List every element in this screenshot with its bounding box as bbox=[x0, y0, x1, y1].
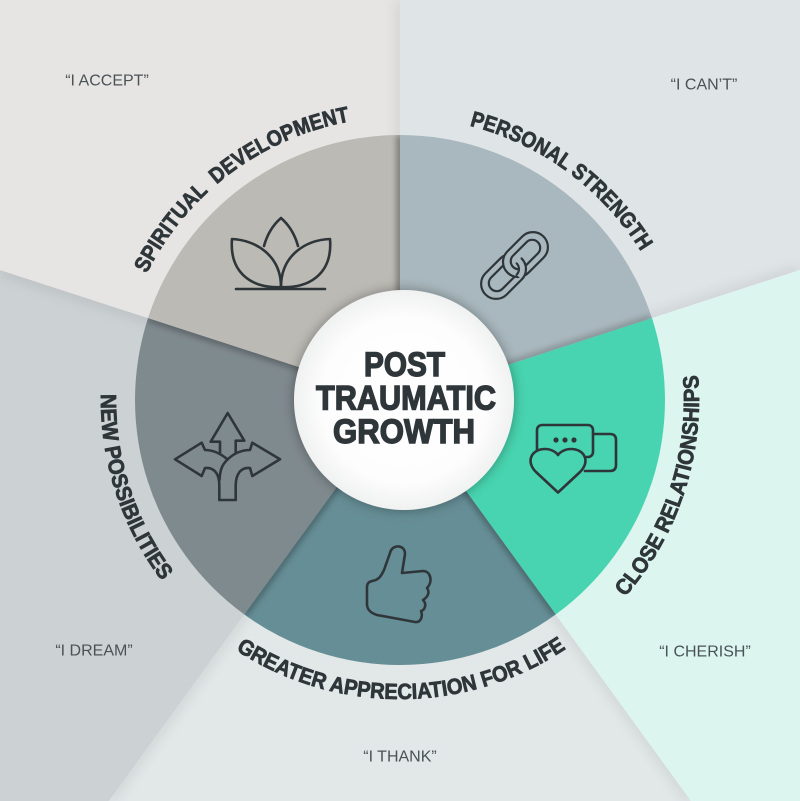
title: GROWTH bbox=[333, 413, 475, 451]
wedge: close relationships bbox=[400, 318, 665, 614]
icon: thumbs up bbox=[367, 546, 430, 622]
label: personal strength: PERSONAL STRENGTH bbox=[470, 111, 654, 251]
panel: new possibilities outer bbox=[0, 270, 400, 801]
panel: close relationships outer bbox=[400, 270, 800, 801]
wedge: personal strength bbox=[400, 135, 652, 400]
icon: chain link bbox=[475, 226, 554, 305]
icon: three way arrows bbox=[175, 413, 280, 500]
panel: spiritual development outer bbox=[0, 0, 400, 400]
quote: I can't: “I CAN’T” bbox=[671, 76, 737, 94]
quote: I dream: “I DREAM” bbox=[55, 642, 133, 660]
quote: I accept: “I ACCEPT” bbox=[65, 72, 149, 90]
quote: I thank: “I THANK” bbox=[363, 748, 437, 766]
label: new possibilities: NEW POSSIBILITIES bbox=[100, 395, 172, 579]
label: close relationships: CLOSE RELATIONSHIPS bbox=[616, 376, 700, 594]
title: POST bbox=[364, 346, 445, 384]
panel: greater appreciation outer bbox=[109, 400, 691, 801]
icon: lotus bbox=[232, 218, 330, 289]
icon: chat bubbles and heart bbox=[531, 425, 616, 492]
label: greater appreciation for life: GREATER APPRECIATION FOR LIFE bbox=[238, 636, 566, 700]
wedge: greater appreciation for life bbox=[244, 400, 556, 665]
center circle with title bbox=[294, 290, 514, 510]
wedge: spiritual development bbox=[148, 135, 400, 400]
quote: I cherish: “I CHERISH” bbox=[659, 644, 751, 660]
wedge: new possibilities bbox=[135, 318, 400, 614]
label: spiritual development: SPIRITUAL DEVELOPMENT bbox=[134, 106, 348, 272]
title bbox=[316, 346, 496, 451]
title: TRAUMATIC bbox=[316, 380, 496, 418]
panel: personal strength outer bbox=[400, 0, 800, 400]
